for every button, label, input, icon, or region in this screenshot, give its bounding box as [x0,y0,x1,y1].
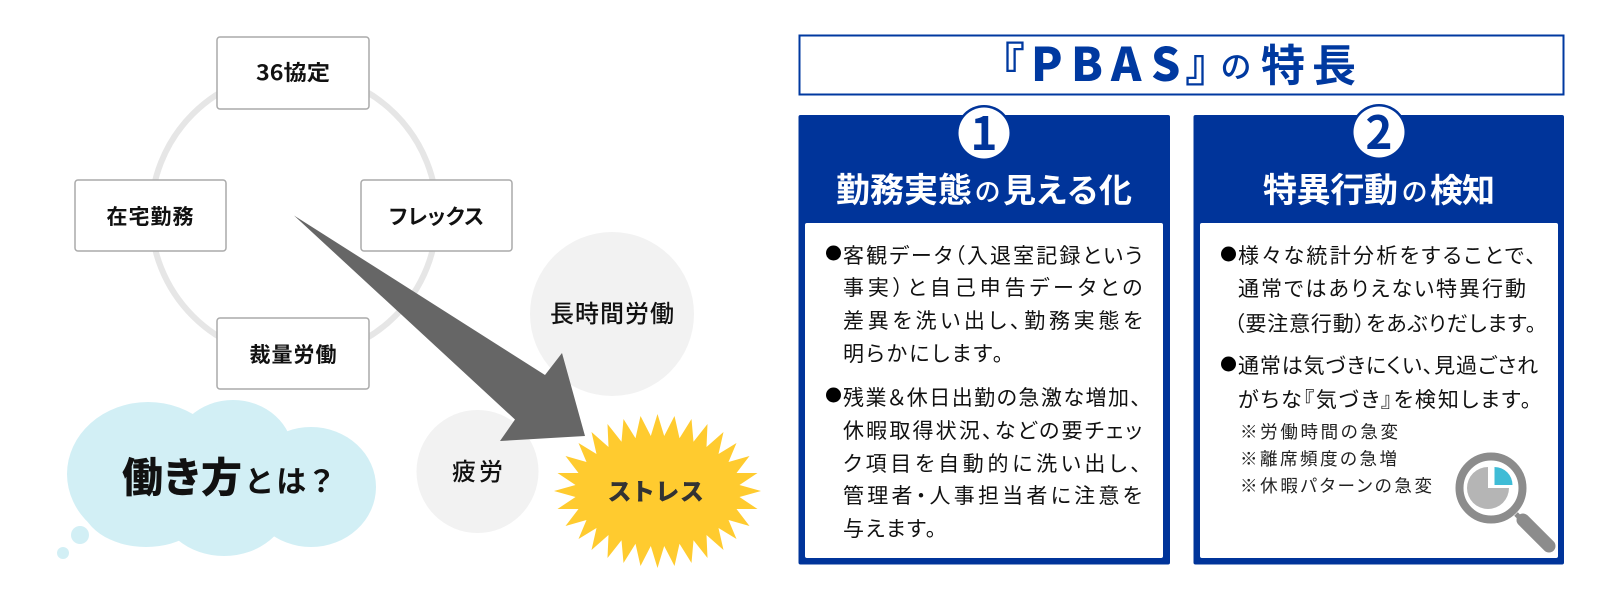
box: flex [361,180,512,251]
heading: 勤務実態 [836,163,972,212]
heading: 見える化 [1003,164,1132,212]
box: remote work [75,180,226,251]
bullets: 差異を洗い出し、勤務実態を [843,305,1142,335]
bullets: 通常ではありえない特異行動 [1238,273,1526,303]
heading: の [1402,172,1427,209]
bullets: 残業＆休日出勤の急激な増加、 [843,382,1141,412]
box: remote work: 在宅勤務 [106,201,194,231]
box: flex: フレックス [389,201,484,231]
heading: の [975,172,1000,209]
bullets: 明らかにします。 [843,338,1003,368]
badge 2 [1351,97,1407,163]
title: 』 [1186,29,1209,95]
bullets [826,240,1142,543]
body [1200,223,1558,558]
icon: magnifier with pie chart [1460,456,1549,546]
panel 2: anomaly detection [1194,97,1564,564]
bullets [1221,240,1538,414]
bullets: 通常は気づきにくい、見過ごされ [1238,350,1538,380]
box: discretionary labor [217,318,369,389]
badge 1 [956,98,1012,164]
bullets: 事実）と自己申告データとの [843,272,1142,302]
thought cloud [57,400,376,559]
panel 1: visibility of actual work [798,98,1170,564]
circle: fatigue [416,410,538,533]
title: PBAS [1031,29,1180,95]
cloud heading: 働き方 [122,444,242,504]
circle: fatigue: 疲労 [452,452,503,487]
notes: ※労働時間の急変 [1240,419,1398,444]
title: 特 [1261,30,1305,94]
notes: ※離席頻度の急増 [1240,446,1397,471]
box: 36 agreement [217,37,369,109]
bullets: （要注意行動）をあぶりだします。 [1234,308,1536,338]
title: 『 [1001,29,1024,95]
cloud heading: とは？ [246,457,332,501]
burst: stress [554,414,761,568]
bullets: ク項目を自動的に洗い出し、 [843,448,1141,478]
diagram: work styles ring [75,37,512,389]
arrow [294,216,585,441]
title: の [1221,42,1251,87]
box: discretionary labor: 裁量労働 [250,339,336,369]
bullets: 与えます。 [843,513,936,543]
heading: 特異行動 [1263,163,1398,212]
notes [1240,419,1432,498]
ring [151,72,437,358]
box: 36 agreement: 36協定 [256,57,330,87]
badge 1: 1 [970,98,998,164]
title: 長 [1312,30,1356,94]
burst: stress: ストレス [608,472,704,507]
bullets: 客観データ（入退室記録という [843,240,1142,270]
circle: long working hours: 長時間労働 [550,294,674,329]
badge 2: 2 [1365,97,1393,163]
bullets: 様々な統計分析をすることで、 [1238,240,1536,270]
body [805,223,1163,558]
bullets: 管理者・人事担当者に注意を [843,480,1142,510]
bullets: 休暇取得状況、などの要チェッ [843,415,1142,445]
title box [800,29,1564,95]
circle: long working hours [530,232,694,396]
heading: 検知 [1430,164,1495,212]
bullets: がちな『気づき』を検知します。 [1238,384,1531,414]
notes: ※休暇パターンの急変 [1240,473,1432,498]
